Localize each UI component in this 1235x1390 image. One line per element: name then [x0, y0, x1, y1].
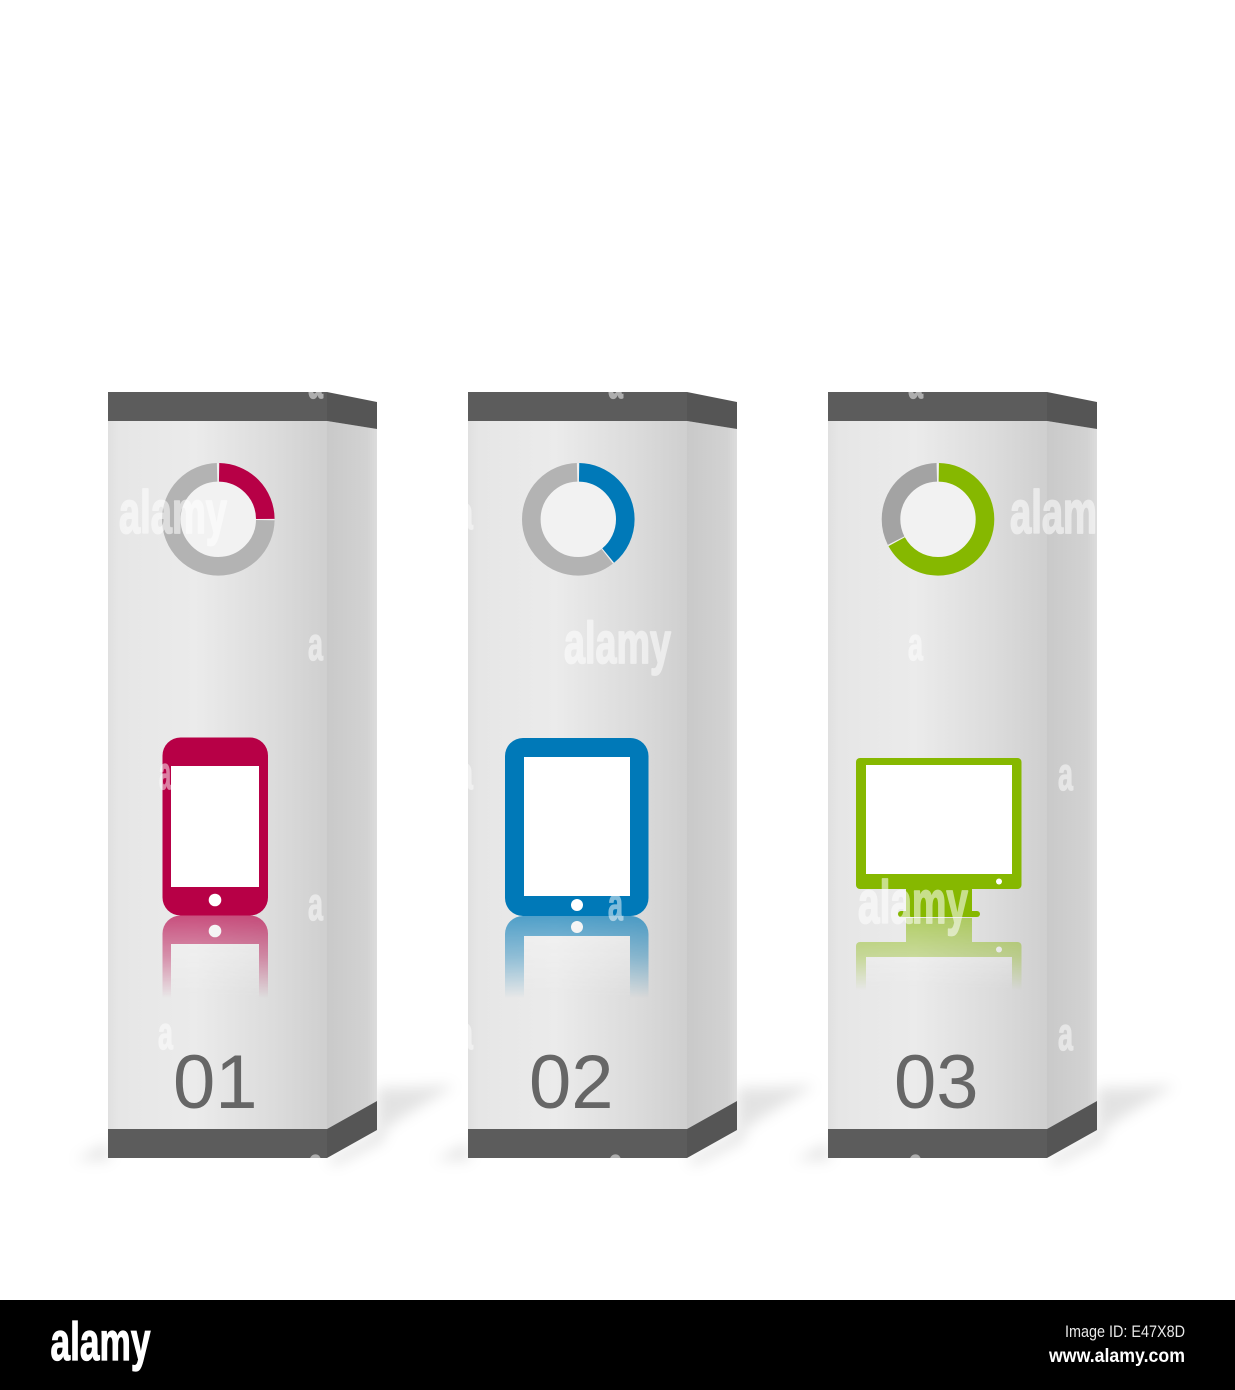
watermarks: a [1058, 1008, 1073, 1060]
image id: Image ID: E47X8D [1065, 1322, 1185, 1341]
watermarks: a [308, 878, 323, 930]
icon: tablet [505, 738, 648, 916]
footer bar [0, 1300, 1235, 1390]
desktop monitor reflection [856, 918, 1022, 986]
watermarks: a [608, 878, 623, 930]
box 02 top band [468, 392, 737, 429]
watermarks: a [908, 1138, 923, 1190]
box 01 front face [108, 421, 327, 1129]
box 03 donut chart [891, 472, 985, 566]
box 01 donut chart [171, 472, 265, 566]
box 01 floor shadow [75, 1085, 455, 1165]
box 02 floor shadow [435, 1085, 815, 1165]
watermarks: a [908, 618, 923, 670]
watermarks: a [158, 1007, 173, 1059]
icon: desktop monitor [856, 758, 1022, 917]
watermarks: alam [1010, 479, 1097, 546]
watermarks: a [608, 1138, 623, 1190]
website: www.alamy.com [1048, 1346, 1185, 1367]
box 03 bottom band [828, 1101, 1097, 1158]
panel: box 03 [795, 392, 1175, 1165]
watermarks: a [308, 1138, 323, 1190]
number 01: 01 [173, 1040, 258, 1125]
watermarks: a [159, 747, 171, 799]
box 03 side face [1047, 421, 1097, 1129]
box 01 side face [327, 421, 377, 1129]
watermarks: a [608, 356, 623, 408]
box 01 top band [108, 392, 377, 429]
icon: smartphone [162, 738, 268, 916]
number 02: 02 [529, 1040, 614, 1125]
box 02 side face [687, 421, 737, 1129]
watermarks: alamy [119, 479, 227, 546]
watermarks: a [1058, 748, 1073, 800]
watermarks: a [458, 747, 473, 799]
watermarks: a [308, 356, 323, 408]
watermarks: a [308, 618, 323, 670]
smartphone reflection [162, 916, 268, 994]
watermarks [119, 356, 1097, 1190]
box 02 front face [468, 421, 687, 1129]
box 02 donut chart [531, 472, 625, 566]
tablet reflection [505, 916, 648, 994]
watermarks: a [458, 487, 473, 539]
watermarks: alamy [564, 611, 671, 676]
number 03: 03 [894, 1040, 979, 1125]
box 02 bottom band [468, 1101, 737, 1158]
box 03 front face [828, 421, 1047, 1129]
panel: box 01 [75, 392, 455, 1165]
footer logo: alamy [50, 1312, 150, 1372]
watermarks: alamy [858, 869, 968, 936]
watermarks: a [458, 1007, 473, 1059]
watermarks: a [908, 356, 923, 408]
box 03 floor shadow [795, 1085, 1175, 1165]
box 03 top band [828, 392, 1097, 429]
panel: box 02 [435, 392, 815, 1165]
box 01 bottom band [108, 1101, 377, 1158]
